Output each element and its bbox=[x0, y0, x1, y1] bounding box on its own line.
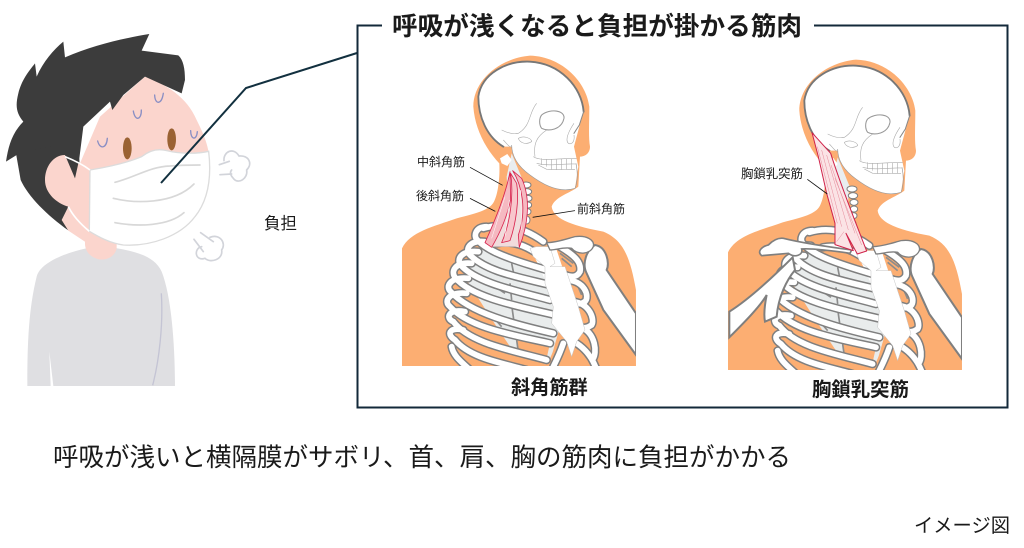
label: sternocleidomastoid: 胸鎖乳突筋 bbox=[741, 166, 803, 181]
pointer arrow bbox=[807, 179, 827, 194]
figure caption: 斜角筋群 bbox=[511, 377, 588, 399]
burden label: 負担 bbox=[264, 214, 297, 233]
image note: イメージ図 bbox=[914, 516, 1010, 537]
scalene muscle figure bbox=[402, 56, 636, 399]
left clavicle bbox=[760, 238, 852, 256]
sweat drops bbox=[98, 93, 197, 147]
label: anterior scalene: 前斜角筋 bbox=[577, 201, 625, 216]
scalene muscles bbox=[485, 171, 527, 247]
main caption: 呼吸が浅いと横隔膜がサボリ、首、肩、胸の筋肉に負担がかかる bbox=[53, 444, 791, 472]
label: posterior scalene: 後斜角筋 bbox=[416, 188, 464, 203]
mask bbox=[89, 150, 210, 245]
pointer arrows bbox=[470, 167, 575, 217]
eyes bbox=[123, 128, 176, 159]
shirt bbox=[27, 248, 175, 386]
panel frame bbox=[358, 26, 1008, 408]
person with mask bbox=[6, 34, 250, 386]
figure caption: 胸鎖乳突筋 bbox=[812, 379, 909, 401]
face bbox=[80, 77, 209, 230]
neck bbox=[85, 230, 117, 260]
connector line from mask to panel bbox=[161, 53, 357, 183]
breath puff upper bbox=[219, 151, 250, 181]
lower back hair bbox=[16, 143, 80, 231]
panel title: 呼吸が浅くなると負担が掛かる筋肉 bbox=[392, 11, 802, 41]
hair bbox=[6, 34, 185, 230]
breath puff lower bbox=[194, 233, 223, 261]
ear and jaw bbox=[45, 155, 100, 243]
ear strap bbox=[65, 157, 90, 231]
mask folds bbox=[113, 165, 200, 225]
shirt seam bbox=[153, 293, 162, 385]
left arm bbox=[729, 257, 795, 337]
sternocleidomastoid muscle bbox=[812, 133, 867, 254]
label: middle scalene: 中斜角筋 bbox=[417, 154, 465, 169]
sternocleidomastoid figure bbox=[728, 60, 962, 401]
